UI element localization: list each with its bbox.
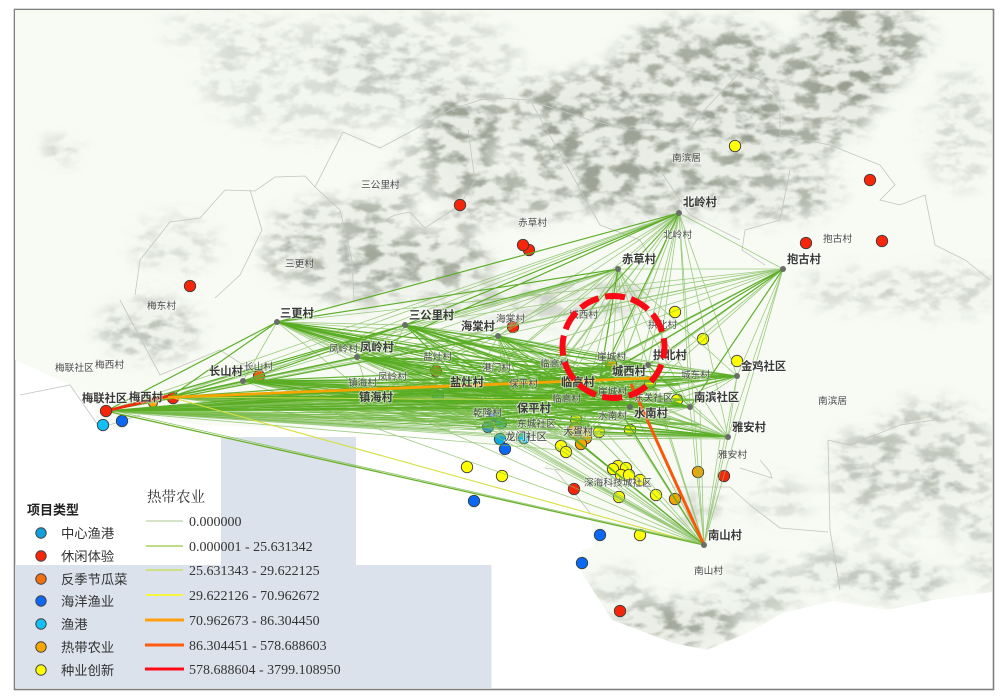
legend: project types: 热带农业 <box>61 640 114 655</box>
small village labels: 北岭村 <box>663 228 692 241</box>
small village labels: 赤草村 <box>518 216 547 229</box>
main village labels: 南山村 <box>708 528 743 542</box>
pale blue legend backdrop upper block <box>221 437 356 565</box>
main village labels: 临高村 <box>561 375 596 389</box>
small village labels: 南滨居 <box>818 394 847 407</box>
small village labels: 三更村 <box>285 257 314 270</box>
main village labels: 拱北村 <box>653 348 688 362</box>
small village labels: 凤岭村 <box>378 370 407 383</box>
orange link: Meixi to Chengxi <box>152 378 650 398</box>
legend: project types: 休闲体验 <box>61 549 114 564</box>
small village labels: 长山村 <box>244 360 273 373</box>
main village labels: 赤草村 <box>622 252 657 266</box>
main village labels: 北岭村 <box>683 195 718 209</box>
small village labels: 凤岭村 <box>329 342 358 355</box>
legend: project types: 项目类型 <box>27 502 79 518</box>
network lines: thin light green links <box>106 213 783 545</box>
main village labels: 龙门社区 <box>505 430 547 443</box>
main village labels: 水南村 <box>634 406 669 420</box>
main village labels: 城西村 <box>612 364 647 378</box>
main village labels: 南滨社区 <box>694 390 739 404</box>
main village labels <box>82 195 822 542</box>
administrative boundaries <box>20 72 990 590</box>
small village labels: 南滨居 <box>672 151 701 164</box>
main village labels: 大疍村 <box>563 425 593 438</box>
main village labels: 长山村 <box>209 364 244 378</box>
small village labels: 城东村 <box>681 368 710 381</box>
small village labels: 海棠村 <box>496 312 525 325</box>
small village labels: 东关社区 <box>634 391 673 404</box>
legend: tropical agriculture link classes: 70.962673 - 86.304450 <box>189 614 320 629</box>
main village labels: 抱古村 <box>787 252 822 266</box>
main village labels: 海棠村 <box>461 319 496 333</box>
small village labels: 盐灶村 <box>423 350 452 363</box>
small village labels: 镇海村 <box>348 376 377 389</box>
network lines: dense east-west bundle <box>106 322 710 430</box>
small village labels: 梅西村 <box>95 358 124 371</box>
small village labels <box>55 151 852 577</box>
legend: tropical agriculture link classes: 29.622126 - 70.962672 <box>189 589 320 604</box>
small village labels: 临高村 <box>540 357 569 370</box>
small village labels: 深海科技城社区 <box>584 476 652 489</box>
legend: tropical agriculture link classes: 25.631343 - 29.622125 <box>189 564 320 579</box>
red link: Meilian to Meixi <box>106 396 168 411</box>
highlight: red dashed circle <box>548 282 679 412</box>
legend: project types: 反季节瓜菜 <box>61 572 127 587</box>
small village labels: 保平村 <box>509 377 538 390</box>
legend: tropical agriculture link classes: 热带农业 <box>147 488 205 506</box>
legend: project types: 海洋渔业 <box>61 594 114 609</box>
small village labels: 崖城村 <box>598 385 627 398</box>
main village labels: 保平村 <box>517 401 552 415</box>
small village labels: 乾隆村 <box>473 406 502 419</box>
main village labels: 梅西村 <box>129 390 164 404</box>
network lines: stronger green links <box>106 213 783 545</box>
pale blue legend backdrop lower block <box>15 565 492 688</box>
main village labels: 雅安村 <box>732 420 767 434</box>
legend: tropical agriculture link classes: 0.000001 - 25.631342 <box>189 540 313 555</box>
small village labels: 梅联社区 <box>55 361 94 374</box>
main village labels: 镇海村 <box>359 390 394 404</box>
small village labels: 梅东村 <box>147 299 176 312</box>
main village labels: 三公里村 <box>409 308 455 322</box>
legend: project types: 渔港 <box>61 617 88 632</box>
project type points <box>97 140 888 617</box>
small village labels: 临高村 <box>552 392 581 405</box>
village node dots <box>240 210 786 548</box>
point: Meilian red marker <box>100 405 112 417</box>
legend: tropical agriculture link classes: 0.000000 <box>189 515 242 530</box>
small village labels: 雅安村 <box>718 448 747 461</box>
small village labels: 东城社区 <box>517 417 556 430</box>
small village labels: 三公里村 <box>361 178 400 191</box>
main village labels: 三更村 <box>280 306 315 320</box>
small village labels: 城西村 <box>569 308 598 321</box>
small village labels: 抱古村 <box>823 232 852 245</box>
legend: project types: 中心渔港 <box>61 526 115 541</box>
main village labels: 盐灶村 <box>450 375 485 389</box>
legend: tropical agriculture link classes: 86.304451 - 578.688603 <box>189 639 327 654</box>
yellow link from Meixi to Nanshan <box>106 397 704 545</box>
main village labels: 梅联社区 <box>82 391 127 405</box>
small village labels: 港门村 <box>482 361 511 374</box>
small village labels: 水南村 <box>598 409 627 422</box>
legend: tropical agriculture link classes <box>145 488 341 678</box>
main village labels: 凤岭村 <box>360 340 395 354</box>
main village labels: 金鸡社区 <box>741 359 786 373</box>
small village labels: 拱北村 <box>648 318 677 331</box>
legend: project types: 种业创新 <box>61 663 114 678</box>
legend: tropical agriculture link classes: 578.688604 - 3799.108950 <box>189 663 341 678</box>
small village labels: 崖城村 <box>597 350 626 363</box>
legend: project types <box>27 502 127 678</box>
small village labels: 南山村 <box>694 564 723 577</box>
deep orange link: Shuinan to Nanshan <box>631 384 704 545</box>
